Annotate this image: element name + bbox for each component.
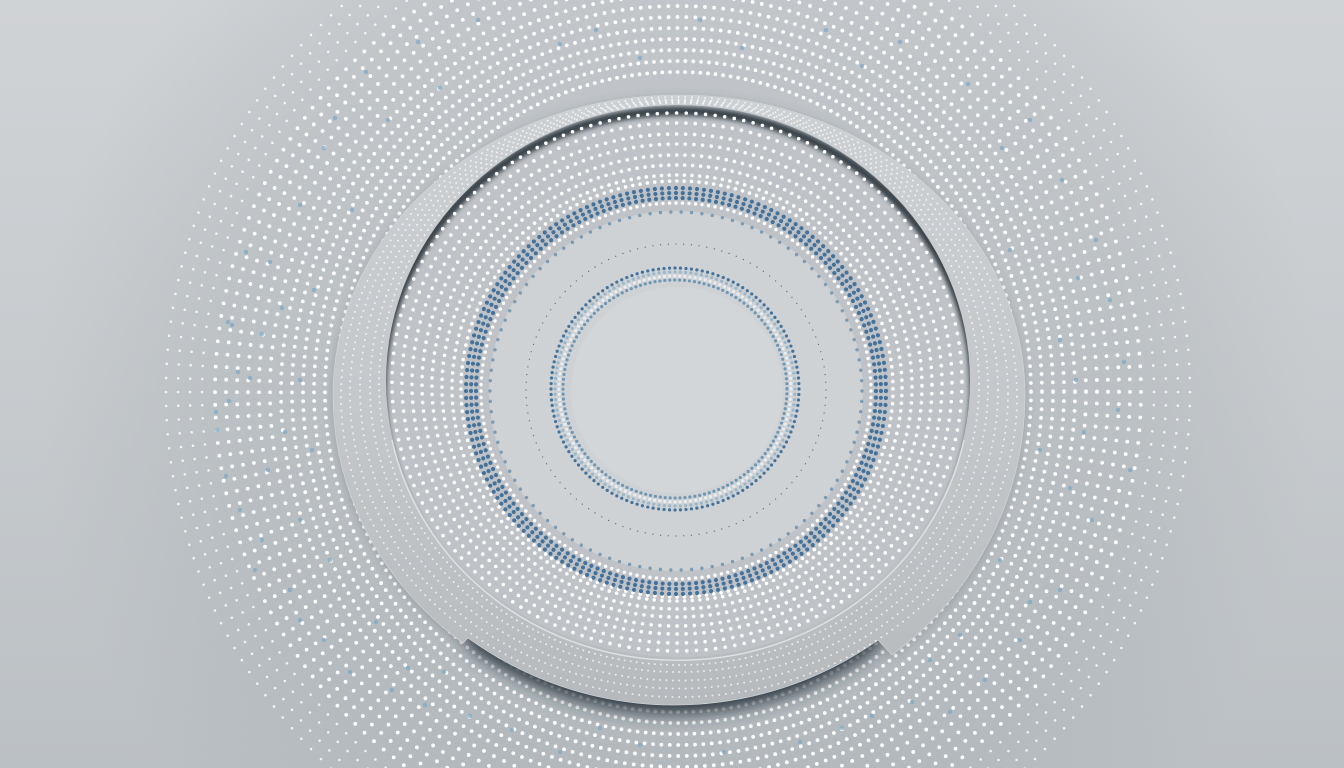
- central plain disc: [571, 287, 783, 493]
- dense outer dot rings: [215, 0, 1141, 768]
- inner recessed disc: [382, 105, 974, 667]
- blue specks on outer halo: [216, 20, 1130, 752]
- dark shadow under plate: [468, 600, 880, 713]
- blue rows: [466, 188, 886, 594]
- faint outermost dot rings: [166, 0, 1190, 768]
- plain middle disc: [489, 211, 863, 571]
- bright rim line: [392, 440, 964, 660]
- outer blue dotted band: [466, 188, 886, 594]
- inner shadow at top edge: [386, 105, 970, 528]
- inner white dot rings: [392, 113, 962, 651]
- outer dotted halo: [166, 0, 1190, 768]
- outer ring plate with notches: [333, 95, 1025, 705]
- soft shadow around plate: [333, 97, 1025, 707]
- dots on ring plate: [341, 97, 1017, 697]
- white interleaved dots: [481, 203, 871, 579]
- inner blue dotted band: [551, 268, 799, 510]
- inner disc fill: [386, 105, 970, 657]
- thin dotted guide circle: [526, 244, 826, 536]
